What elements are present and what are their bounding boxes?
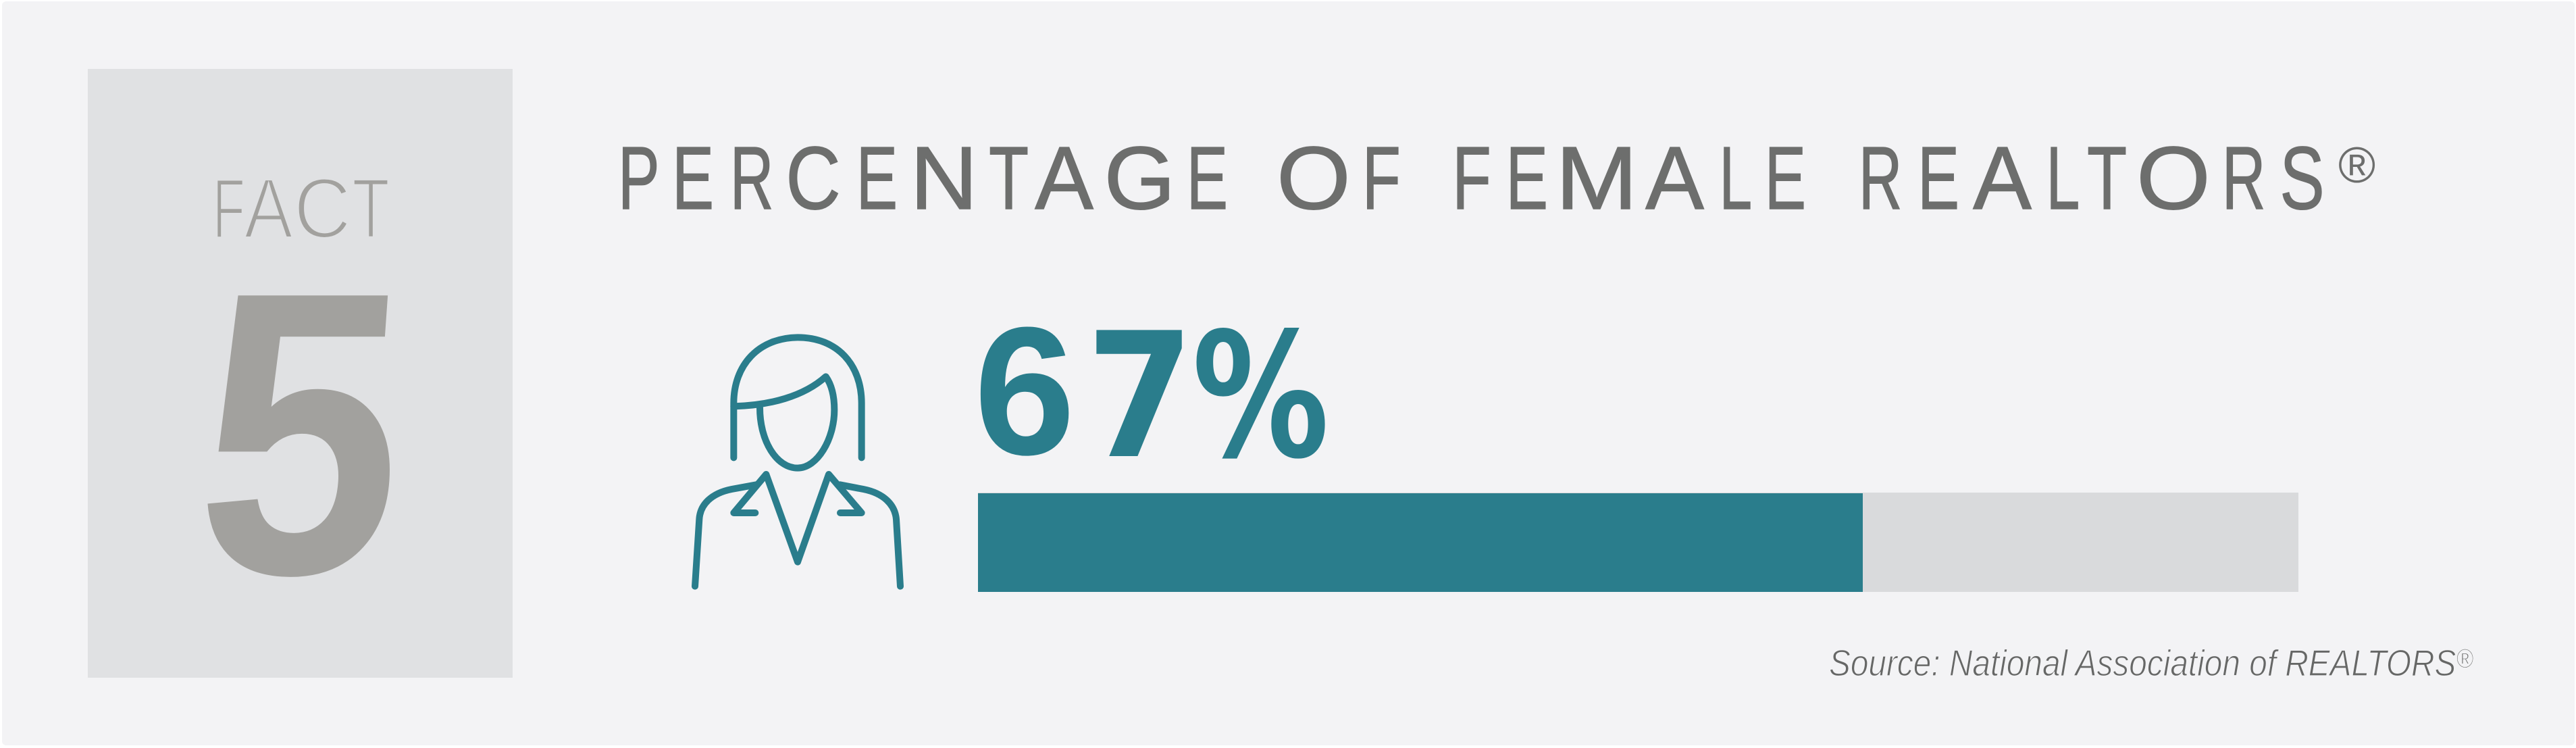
title: M bbox=[1555, 128, 1638, 228]
panel: fact number bbox=[88, 69, 513, 678]
statistic: 67%: 6 bbox=[974, 290, 1075, 493]
title: S bbox=[2280, 128, 2325, 228]
title: N bbox=[910, 128, 978, 228]
label: FACT: A bbox=[244, 161, 293, 256]
title: O bbox=[1277, 128, 1351, 228]
title: F bbox=[1452, 128, 1491, 228]
title: F bbox=[1362, 128, 1401, 228]
title: R bbox=[2222, 128, 2265, 228]
icon: businesswoman bbox=[695, 337, 900, 587]
source note: Source: National Association of REALTORS bbox=[1829, 642, 2551, 684]
title: L bbox=[2046, 128, 2080, 228]
title: E bbox=[1187, 128, 1228, 228]
title: O bbox=[2136, 128, 2211, 228]
source note: ® bbox=[2456, 644, 2473, 674]
title: T bbox=[2087, 128, 2127, 228]
title: R bbox=[730, 128, 773, 228]
title: A bbox=[1035, 128, 1093, 228]
title: P bbox=[618, 128, 660, 228]
fact panel background bbox=[88, 69, 513, 678]
title: R bbox=[1859, 128, 1902, 228]
title: L bbox=[1720, 128, 1752, 228]
title: ® bbox=[2338, 136, 2375, 193]
label: FACT: T bbox=[352, 161, 390, 256]
title: G bbox=[1104, 128, 1175, 228]
bar track bbox=[978, 493, 2298, 592]
label: FACT: C bbox=[294, 161, 351, 256]
title: E bbox=[1506, 128, 1548, 228]
bar fill 67% bbox=[978, 493, 1863, 592]
title: E bbox=[672, 128, 714, 228]
title: C bbox=[785, 128, 841, 228]
title: E bbox=[1917, 128, 1959, 228]
title: E bbox=[1765, 128, 1806, 228]
title: T bbox=[989, 128, 1029, 228]
title: A bbox=[1973, 128, 2032, 228]
statistic: 67%: 7 bbox=[1086, 296, 1194, 497]
label: FACT: F bbox=[212, 161, 245, 256]
title: E bbox=[856, 128, 898, 228]
title: A bbox=[1645, 128, 1704, 228]
progress bar bbox=[978, 493, 2298, 592]
statistic: 67%: % bbox=[1192, 296, 1329, 497]
fact number 5: 5 bbox=[186, 208, 419, 659]
